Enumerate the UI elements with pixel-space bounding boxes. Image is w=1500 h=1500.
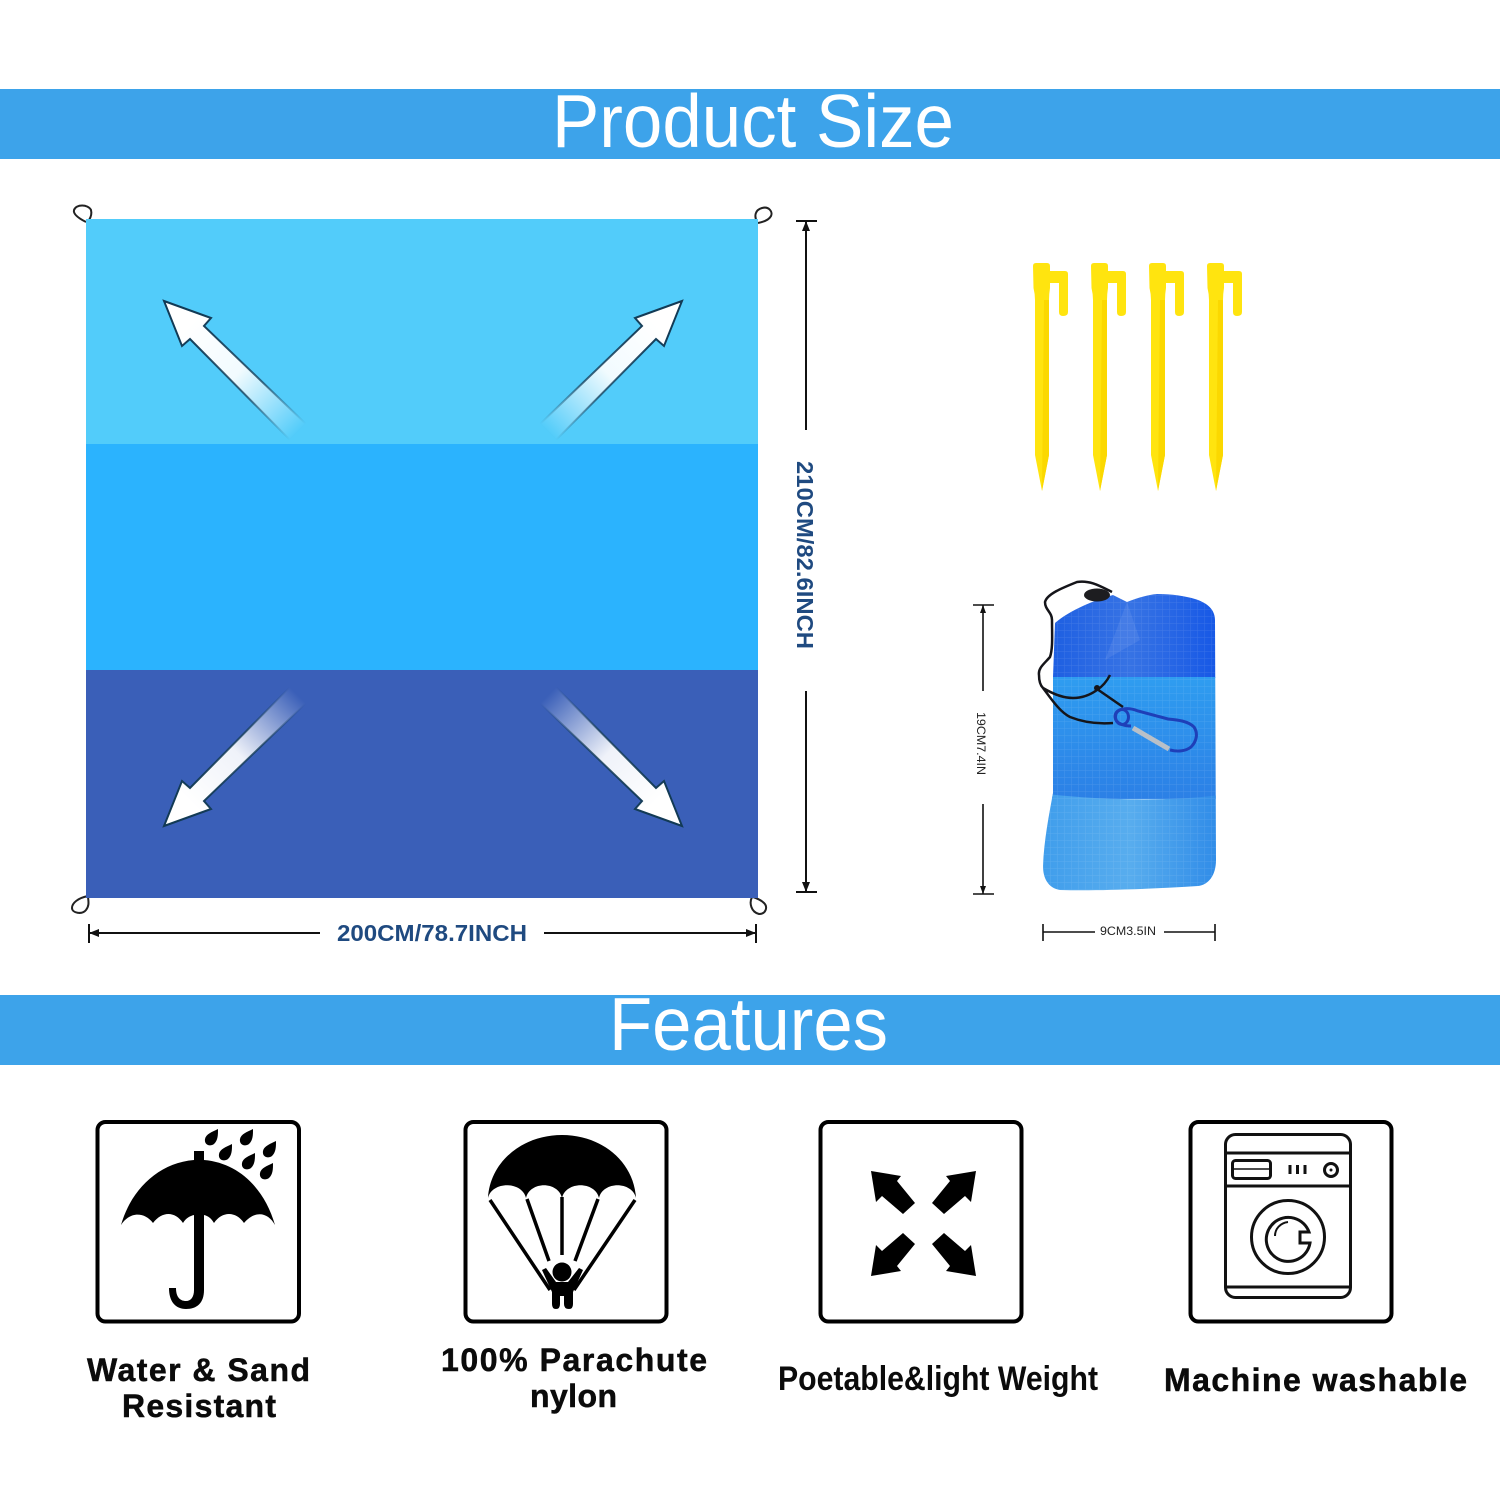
label: Water & Sand xyxy=(87,1352,310,1388)
label xyxy=(441,1342,707,1414)
icon: washing machine xyxy=(1225,1134,1351,1298)
arrow: top left xyxy=(164,301,306,440)
dimension: mat width: 200CM/78.7INCH xyxy=(337,920,527,946)
icon: four yellow stakes xyxy=(1033,263,1242,491)
banner: Product Size xyxy=(0,79,1500,163)
arrow: bottom left xyxy=(164,687,306,826)
banner: Product Size: Product Size xyxy=(552,79,954,163)
stake 3 xyxy=(1149,263,1184,491)
feature: machine washable xyxy=(1164,1122,1467,1398)
feature: portable and light weight xyxy=(778,1122,1098,1398)
feature: parachute nylon xyxy=(441,1122,707,1414)
arrow: top right xyxy=(540,301,682,440)
dimension: mat height: 210CM/82.6INCH xyxy=(792,461,818,649)
icon: umbrella xyxy=(121,1129,276,1309)
dimension: pouch height: 19CM7.4IN xyxy=(974,712,986,775)
dimension: mat width xyxy=(89,920,756,946)
arrow: bottom right xyxy=(540,687,682,826)
stake 2 xyxy=(1091,263,1126,491)
label: 100% Parachute xyxy=(441,1342,707,1378)
icon: expand arrows xyxy=(871,1171,976,1276)
feature: water and sand resistant xyxy=(87,1122,310,1424)
dimension: pouch width: 9CM3.5IN xyxy=(1100,926,1156,938)
banner: Features xyxy=(0,982,1500,1066)
stake 4 xyxy=(1207,263,1242,491)
label: nylon xyxy=(530,1378,617,1414)
dimension: pouch height xyxy=(973,605,994,894)
banner: Features: Features xyxy=(609,982,888,1066)
label xyxy=(87,1352,310,1424)
label: Poetable&light Weight xyxy=(778,1360,1098,1398)
label: Machine washable xyxy=(1164,1362,1467,1398)
stake 1 xyxy=(1033,263,1068,491)
carabiner xyxy=(1115,709,1196,751)
mat: tri-colour beach blanket xyxy=(72,206,772,914)
icon: storage pouch with carabiner xyxy=(1039,582,1220,895)
icon: parachute xyxy=(488,1135,636,1309)
dimension: mat height xyxy=(792,221,818,892)
dimension: pouch width xyxy=(1043,924,1215,941)
label: Resistant xyxy=(122,1388,276,1424)
